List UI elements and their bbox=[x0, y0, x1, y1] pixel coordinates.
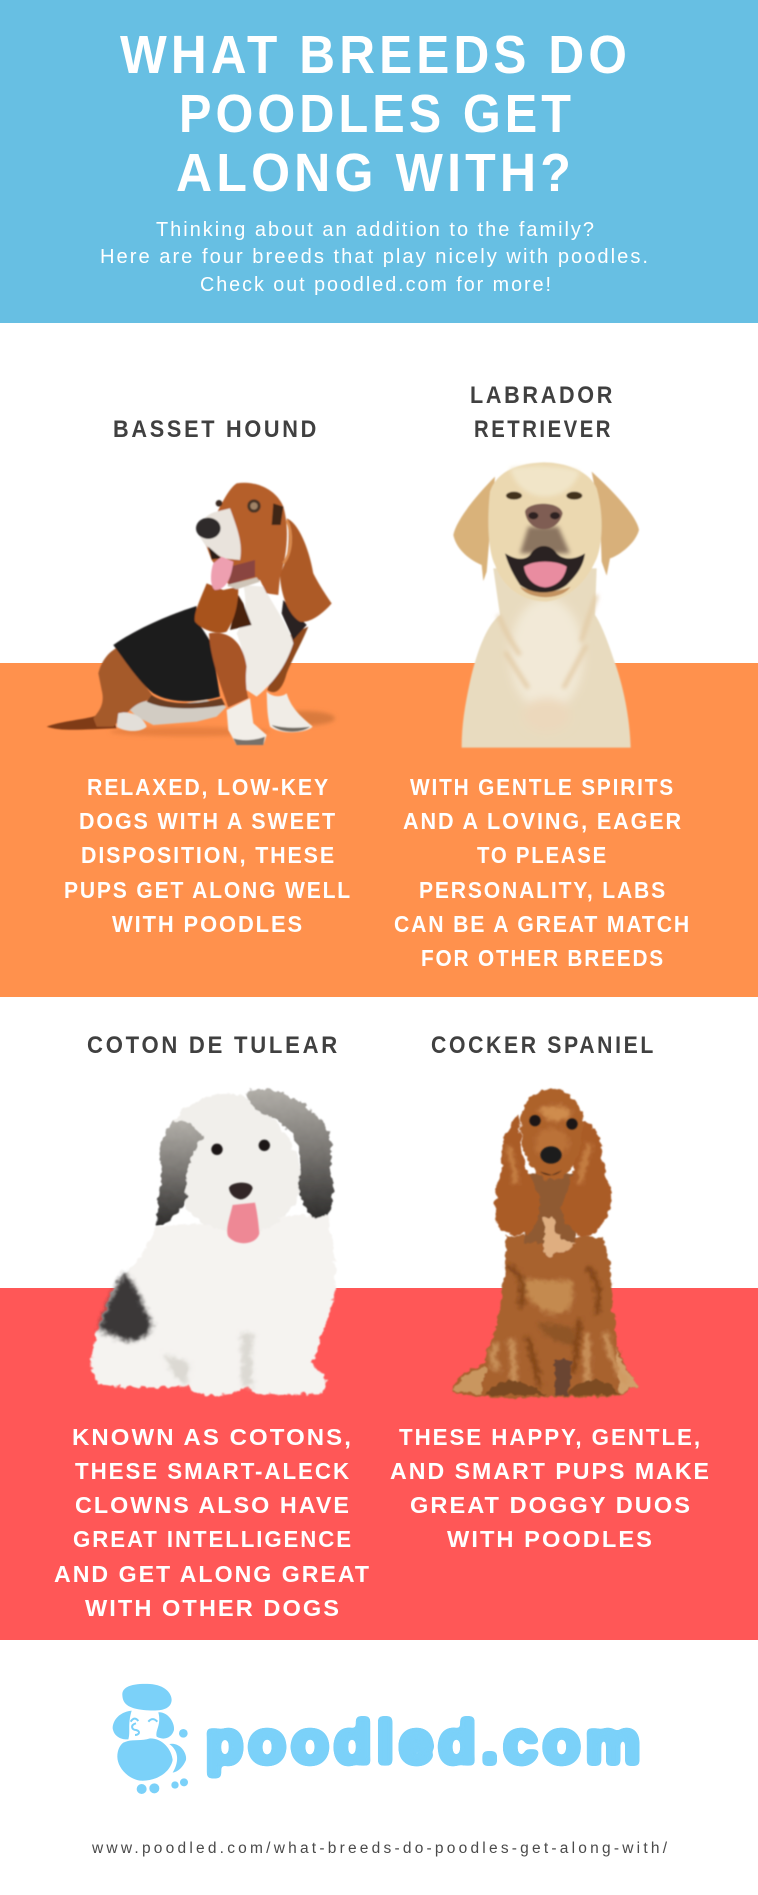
heading: labrador retriever bbox=[470, 382, 615, 443]
orange band bbox=[0, 663, 758, 997]
header panel bbox=[0, 0, 758, 323]
body text: labrador: WITH GENTLE SPIRITS bbox=[410, 774, 675, 800]
body text: labrador: TO PLEASE bbox=[477, 842, 608, 868]
body text: labrador: PERSONALITY, LABS bbox=[419, 877, 667, 903]
subtitle bbox=[100, 219, 650, 296]
body text: basset hound: PUPS GET ALONG WELL bbox=[64, 877, 352, 903]
illustration: basset hound bbox=[47, 483, 335, 745]
subtitle: Check out poodled.com for more! bbox=[200, 274, 553, 296]
body text: cocker spaniel: AND SMART PUPS MAKE bbox=[390, 1458, 711, 1484]
source url: www.poodled.com/what-breeds-do-poodles-get-along-with/ bbox=[91, 1840, 668, 1857]
subtitle: Thinking about an addition to the family? bbox=[156, 219, 596, 241]
title bbox=[120, 25, 631, 203]
red band bbox=[0, 1288, 758, 1640]
body text: labrador bbox=[394, 774, 691, 971]
subtitle: Here are four breeds that play nicely with poodles. bbox=[100, 246, 650, 268]
body text: coton de tulear: KNOWN AS COTONS, bbox=[72, 1424, 353, 1450]
body text: basset hound: WITH POODLES bbox=[112, 911, 304, 937]
body text: coton de tulear: GREAT INTELLIGENCE bbox=[73, 1526, 353, 1552]
body text: cocker spaniel: WITH POODLES bbox=[447, 1526, 654, 1552]
body text: basset hound bbox=[64, 774, 352, 937]
title: POODLES GET bbox=[179, 84, 575, 144]
body text: basset hound: DISPOSITION, THESE bbox=[81, 842, 336, 868]
body text: labrador: FOR OTHER BREEDS bbox=[421, 945, 665, 971]
logo: poodle mascot bbox=[113, 1684, 188, 1794]
title: ALONG WITH? bbox=[176, 143, 575, 203]
heading: labrador retriever: RETRIEVER bbox=[474, 416, 613, 443]
heading: cocker spaniel: COCKER SPANIEL bbox=[431, 1032, 656, 1059]
body text: labrador: CAN BE A GREAT MATCH bbox=[394, 911, 691, 937]
body text: coton de tulear: AND GET ALONG GREAT bbox=[54, 1561, 371, 1587]
body text: coton de tulear: CLOWNS ALSO HAVE bbox=[75, 1492, 351, 1518]
body text: basset hound: RELAXED, LOW-KEY bbox=[87, 774, 330, 800]
body text: cocker spaniel: GREAT DOGGY DUOS bbox=[410, 1492, 692, 1518]
body text: coton de tulear: WITH OTHER DOGS bbox=[85, 1595, 341, 1621]
illustration: labrador bbox=[453, 462, 639, 748]
title: WHAT BREEDS DO bbox=[120, 25, 631, 85]
illustration: cocker spaniel bbox=[453, 1089, 638, 1398]
body text: basset hound: DOGS WITH A SWEET bbox=[79, 808, 337, 834]
body text: coton de tulear: THESE SMART-ALECK bbox=[75, 1458, 351, 1484]
illustration: coton de tulear bbox=[92, 1088, 335, 1395]
heading: coton de tulear: COTON DE TULEAR bbox=[87, 1032, 340, 1059]
body text: cocker spaniel bbox=[390, 1424, 711, 1552]
logo: poodled.com wordmark: poodled.com bbox=[206, 1709, 646, 1776]
body text: labrador: AND A LOVING, EAGER bbox=[403, 808, 683, 834]
body text: coton de tulear bbox=[54, 1424, 371, 1621]
body text: cocker spaniel: THESE HAPPY, GENTLE, bbox=[399, 1424, 702, 1450]
heading: basset hound: BASSET HOUND bbox=[113, 416, 319, 443]
heading: labrador retriever: LABRADOR bbox=[470, 382, 615, 409]
